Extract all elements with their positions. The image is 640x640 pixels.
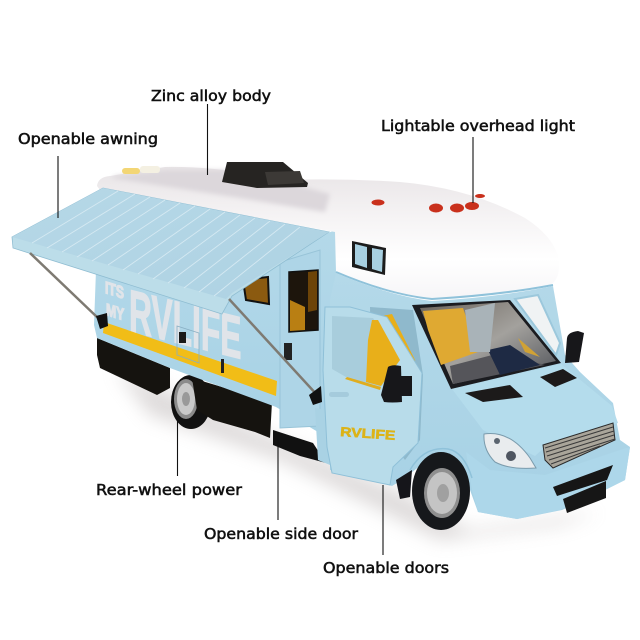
- door handle: [284, 343, 292, 360]
- black step: [273, 430, 326, 463]
- side frame by cab door: [315, 408, 330, 465]
- ground shadow: [115, 368, 600, 540]
- awning support arms: [30, 253, 322, 405]
- small side window: [243, 277, 269, 304]
- front fender and bumper: [466, 447, 630, 519]
- rear wheel: [171, 375, 211, 429]
- overhead window: [352, 241, 386, 275]
- front wheel: [412, 452, 470, 530]
- cab body: [330, 273, 630, 519]
- seat in cab: [367, 314, 418, 385]
- callout: openable side door: Openable side door: [204, 525, 359, 543]
- roof air conditioner: [222, 162, 308, 188]
- white roof cap: [97, 167, 559, 299]
- side graphic: its my rv life: ITS: [105, 278, 124, 303]
- blue trim below cap: [336, 272, 553, 299]
- roof fittings: [122, 166, 160, 174]
- door handle: [329, 392, 349, 397]
- door logo: RVLIFE: [340, 425, 396, 443]
- wheel arch highlight: [410, 449, 472, 478]
- windshield: [412, 300, 561, 389]
- front grille: [543, 423, 615, 468]
- callout: openable doors: [323, 485, 449, 577]
- callout: zinc alloy body: [151, 87, 271, 175]
- overhead lights: [372, 194, 485, 212]
- side graphic: its my rv life: MY: [106, 300, 124, 325]
- yellow stripe: [103, 322, 277, 396]
- hood vents: [465, 369, 577, 402]
- door mirror: [381, 365, 412, 402]
- entry door window: [289, 270, 318, 332]
- callout: rear-wheel power: Rear-wheel power: [96, 481, 243, 499]
- rear coach side panel: [94, 230, 340, 445]
- awning: [12, 188, 329, 314]
- shaded upper roof: [112, 170, 330, 212]
- mud flap: [396, 470, 412, 499]
- black lower chassis: [97, 338, 170, 395]
- door opening interior: [370, 307, 423, 460]
- callout: lightable overhead light: Lightable overhead light: [381, 117, 575, 135]
- vent and latches: [177, 326, 224, 373]
- RV model: [12, 162, 630, 530]
- awning ribs: [32, 191, 300, 296]
- callout: openable doors: Openable doors: [323, 559, 449, 577]
- hood: [452, 364, 618, 456]
- side graphic: its my rv life: RVLIFE: [129, 278, 241, 373]
- entry door: [280, 250, 320, 428]
- callout: openable awning: [18, 130, 158, 218]
- headlight: [484, 434, 536, 468]
- lower bumper and plate: [553, 465, 613, 513]
- door window: [332, 316, 400, 388]
- seat seen through windshield: [423, 308, 478, 365]
- callout: openable awning: Openable awning: [18, 130, 158, 148]
- open cab door: [323, 307, 422, 485]
- right mirror: [565, 331, 584, 363]
- side quarter glass: [515, 295, 560, 355]
- callout: zinc alloy body: Zinc alloy body: [151, 87, 271, 105]
